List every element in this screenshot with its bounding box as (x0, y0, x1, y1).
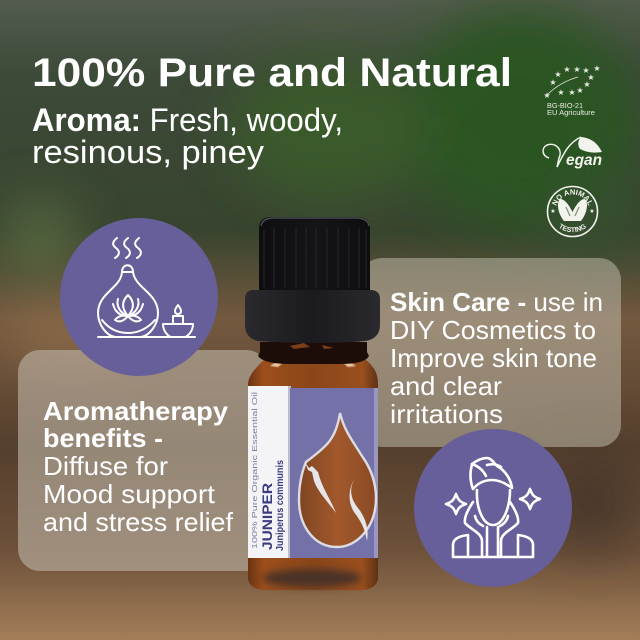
icon: no animal testing logo: ★ (589, 208, 595, 215)
icon: EU organic logo: ★ (582, 66, 590, 75)
icon: EU organic logo (543, 64, 601, 117)
cap collar (245, 290, 380, 343)
icon: EU organic logo: ★ (554, 70, 562, 79)
product bottle (245, 217, 380, 590)
label text: Juniperus communis (275, 460, 286, 551)
bottle neck (258, 342, 369, 364)
icon: EU organic logo: ★ (573, 65, 581, 74)
text: aromatherapy benefits: Mood support (43, 479, 216, 509)
icon: vegan logo: egan (566, 152, 602, 169)
aroma text (32, 102, 343, 170)
icon: EU organic logo: BG-BIO-21 (547, 101, 583, 110)
text: skin care: and clear (390, 371, 502, 401)
text: aromatherapy benefits: Diffuse for (43, 451, 168, 481)
icon: woman with towel (446, 458, 540, 557)
text: skin care (390, 287, 603, 429)
icon: no animal testing logo: ★ (550, 208, 556, 215)
text: skin care: Skin Care - use in (390, 287, 603, 317)
label (248, 386, 378, 558)
icon: EU organic logo: ★ (543, 91, 551, 100)
icon: vegan logo (543, 137, 602, 169)
icon: EU organic logo: ★ (583, 80, 591, 89)
icon: EU organic logo: ★ (563, 65, 571, 74)
aroma text: Aroma: Fresh, woody, (32, 102, 343, 138)
icon: no animal testing logo: NO ANIMAL (552, 189, 592, 206)
text: aromatherapy benefits: benefits - (43, 423, 163, 453)
icon: EU organic logo: ★ (593, 64, 601, 73)
icon: diffuser (98, 238, 195, 337)
icon: no animal testing logo: TESTING (560, 223, 586, 232)
circle: diffuser (60, 218, 218, 376)
icon: EU organic logo: ★ (568, 88, 576, 97)
text: skin care: DIY Cosmetics to (390, 315, 596, 345)
text: aromatherapy benefits: Aromatherapy (43, 396, 229, 426)
text: skin care: Improve skin tone (390, 343, 597, 373)
panel: skin care (360, 258, 621, 447)
icon: no animal testing logo (546, 186, 598, 238)
label text: JUNIPER (259, 483, 275, 550)
text: skin care: irritations (390, 399, 503, 429)
title: 100% Pure and Natural (32, 51, 512, 95)
icon: EU organic logo: ★ (587, 73, 595, 82)
bottle glass (248, 354, 378, 590)
aroma text: resinous, piney (32, 134, 264, 170)
icon: oil drop (299, 413, 376, 547)
icon: EU organic logo: EU Agriculture (547, 108, 595, 117)
circle: skin care (414, 429, 572, 587)
icon: EU organic logo: ★ (557, 88, 565, 97)
label text (250, 391, 286, 551)
icon: EU organic logo: ★ (576, 86, 584, 95)
cap (245, 217, 380, 343)
panel: aromatherapy (18, 350, 268, 571)
text: aromatherapy benefits (43, 396, 234, 537)
text: aromatherapy benefits: and stress relief (43, 507, 234, 537)
label text: 100% Pure Organic Essential Oil (250, 391, 259, 549)
icon: EU organic logo: ★ (549, 78, 557, 87)
